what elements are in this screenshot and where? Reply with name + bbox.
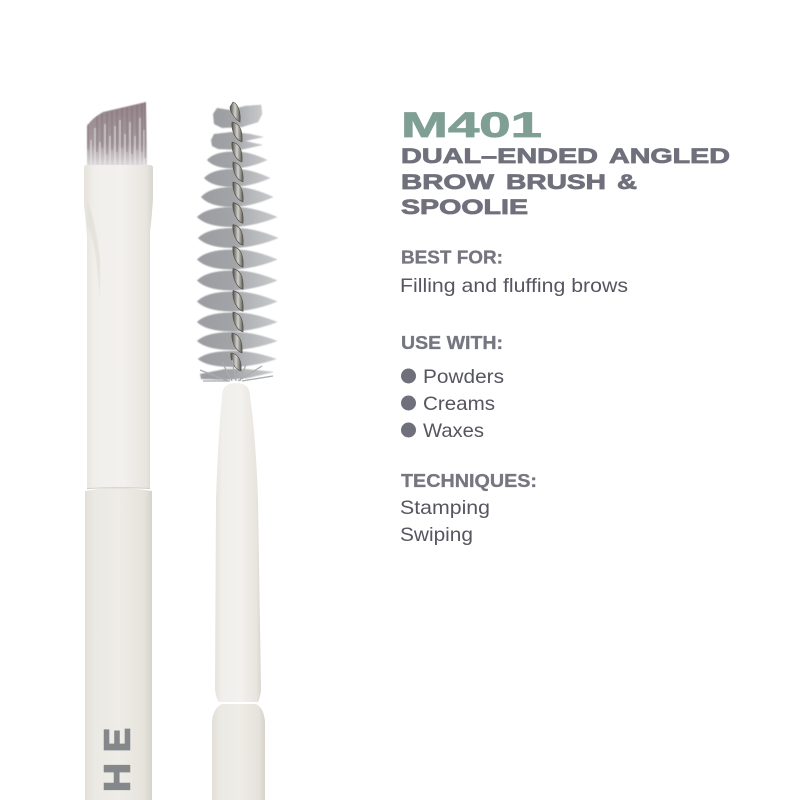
techniques <box>400 470 537 546</box>
use with: Creams <box>423 393 495 415</box>
spoolie bristle tufts <box>197 105 278 380</box>
spoolie lower handle <box>212 704 265 800</box>
product name: BRUSH <box>506 170 606 194</box>
handle lettering: E <box>96 728 138 752</box>
product name: BROW <box>401 170 495 194</box>
best for: Filling and fluffing brows <box>400 275 628 297</box>
product code: M401 <box>401 106 542 145</box>
angled brow brush <box>84 102 153 800</box>
spoolie twisted wire <box>230 102 243 371</box>
product name <box>401 144 730 219</box>
use with: Waxes <box>423 420 484 442</box>
product name: SPOOLIE <box>401 195 528 219</box>
best for <box>400 246 628 297</box>
techniques: Stamping <box>400 497 490 519</box>
spoolie tapered stem <box>215 383 261 702</box>
product name: DUAL–ENDED <box>401 144 598 168</box>
use with <box>401 332 504 442</box>
ferrule shading <box>87 200 100 300</box>
techniques: TECHNIQUES: <box>401 470 537 491</box>
handle lettering <box>96 728 138 792</box>
best for: BEST FOR: <box>401 246 503 268</box>
spoolie base fibres <box>200 360 273 381</box>
handle lettering: H <box>96 763 138 792</box>
bristles <box>87 102 147 166</box>
use with: USE WITH: <box>401 332 503 353</box>
ferrule <box>84 165 153 488</box>
product name: ANGLED <box>609 144 730 168</box>
handle <box>85 488 152 800</box>
techniques: Swiping <box>400 524 473 546</box>
spoolie <box>197 102 278 800</box>
use with: Powders <box>423 366 504 388</box>
handle joint <box>87 487 150 490</box>
product name: & <box>617 170 637 194</box>
